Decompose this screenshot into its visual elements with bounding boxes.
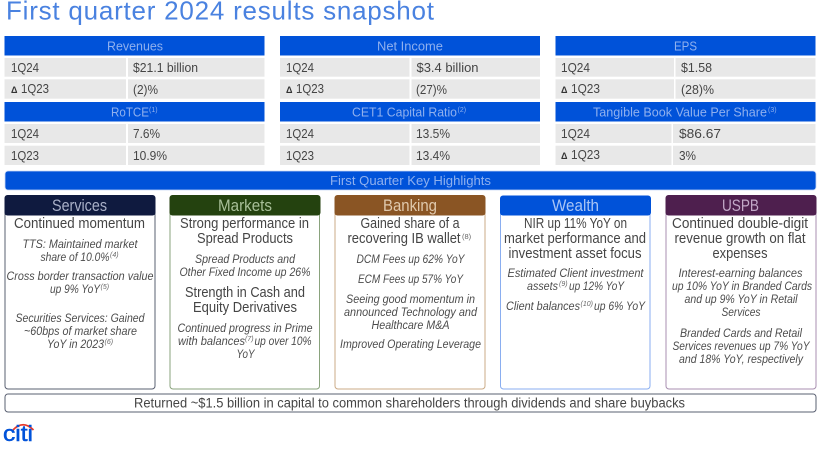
panel: tangible book value table [556, 102, 816, 165]
panel: Wealth: Client balances [506, 301, 580, 313]
panel: USPB: Interest-earning balances [678, 268, 803, 280]
panel: Services: TTS: Maintained market [22, 239, 138, 251]
panel: net income table: Net Income [377, 38, 443, 54]
icon: citi logo: citi [3, 421, 33, 446]
panel: CET1 capital ratio table: 13.5% [416, 127, 450, 141]
panel: EPS table: (28)% [681, 83, 714, 97]
panel: revenues table: Δ [11, 85, 18, 95]
panel: net income table: $3.4 billion [416, 61, 479, 75]
panel: Banking [334, 195, 486, 389]
panel: Banking: Improved Operating Leverage [340, 339, 481, 351]
panel: revenues table: $21.1 billion [133, 61, 198, 75]
panel: Banking: announced Technology and [344, 307, 478, 319]
panel: Markets: (7) [245, 336, 254, 343]
highlights banner: First Quarter Key Highlights [330, 173, 491, 188]
panel: Wealth: up 6% YoY [594, 301, 646, 313]
panel: EPS table: $1.58 [681, 61, 712, 75]
panel: Services: ~60bps of market share [24, 326, 137, 338]
panel: Services: Continued momentum [14, 216, 145, 232]
panel: USPB: Services [722, 307, 761, 319]
panel: RoTCE table: (1) [149, 107, 158, 114]
panel: CET1 capital ratio table: (2) [458, 107, 466, 114]
panel: Services: Services [52, 196, 107, 215]
panel: CET1 capital ratio table: CET1 Capital Ratio [352, 104, 457, 120]
panel: Banking: Healthcare M&A [372, 320, 450, 332]
panel: revenues table: 1Q23 [21, 82, 49, 96]
panel: Wealth: Wealth [552, 196, 599, 215]
panel: Markets: YoY [236, 349, 256, 361]
panel: EPS table [556, 36, 816, 99]
panel: Banking: (8) [462, 232, 472, 241]
panel: tangible book value table: $86.67 [679, 127, 721, 141]
panel: USPB: expenses [712, 246, 768, 262]
panel: Services: YoY in 2023 [47, 339, 105, 351]
panel: Markets: Spread Products and [195, 254, 296, 266]
panel: net income table: (27)% [416, 83, 447, 97]
panel: Services: (6) [104, 339, 113, 346]
panel: Markets [170, 195, 320, 389]
panel: Wealth: Estimated Client investment [508, 268, 644, 280]
highlights banner [5, 171, 816, 190]
panel: USPB: Continued double-digit [672, 216, 808, 232]
panel: Wealth: assets [527, 281, 558, 293]
panel: net income table: 1Q24 [286, 61, 314, 75]
panel: USPB: and 18% YoY, respectively [679, 354, 804, 366]
panel: CET1 capital ratio table: 13.4% [416, 149, 450, 163]
panel: Wealth: investment asset focus [508, 246, 642, 262]
panel: Wealth: market performance and [504, 231, 646, 247]
panel: tangible book value table: 1Q24 [561, 127, 590, 141]
panel: Banking: ECM Fees up 57% YoY [358, 274, 464, 286]
panel: CET1 capital ratio table: 1Q24 [286, 127, 314, 141]
panel: Wealth: (9) [559, 281, 568, 288]
panel: Services: up 9% YoY [50, 284, 101, 296]
panel: tangible book value table: Δ [561, 151, 568, 161]
panel: Markets: with balances [178, 336, 245, 348]
panel: EPS table: 1Q24 [561, 61, 590, 75]
panel: Banking: Seeing good momentum in [346, 294, 475, 306]
panel: Services [4, 195, 156, 389]
panel: tangible book value table: (3) [768, 107, 777, 114]
callout: capital returned [5, 394, 816, 412]
panel: EPS table: 1Q23 [571, 82, 600, 96]
panel: Services: (4) [110, 252, 119, 259]
panel: RoTCE table: 1Q23 [11, 149, 39, 163]
panel: RoTCE table: 10.9% [133, 149, 167, 163]
panel: Services: Cross border transaction value [6, 271, 154, 283]
panel: Markets: Continued progress in Prime [178, 323, 312, 335]
panel: EPS table: EPS [674, 38, 697, 54]
panel: EPS table: Δ [561, 85, 568, 95]
panel: revenues table: (2)% [133, 83, 158, 97]
panel: Services: share of 10.0% [40, 252, 110, 264]
panel: Markets: Strong performance in [180, 216, 309, 232]
panel: Banking: Gained share of a [360, 216, 460, 232]
panel: Wealth: (10) [580, 301, 593, 308]
panel: USPB: revenue growth on flat [674, 231, 806, 247]
panel: USPB [666, 195, 816, 389]
panel: tangible book value table: Tangible Book Value Per Share [593, 104, 767, 120]
panel: net income table: Δ [286, 85, 293, 95]
panel: USPB: and up 9% YoY in Retail [684, 294, 798, 306]
panel: CET1 capital ratio table [280, 102, 540, 165]
panel: Markets: Other Fixed Income up 26% [180, 267, 310, 279]
panel: tangible book value table: 1Q23 [571, 148, 600, 162]
panel: RoTCE table: RoTCE [111, 104, 149, 120]
panel: Wealth: NIR up 11% YoY on [524, 216, 627, 232]
panel: RoTCE table [4, 102, 264, 165]
panel: Markets: up over 10% [254, 336, 312, 348]
panel: Markets: Spread Products [197, 231, 293, 247]
panel: net income table [280, 36, 540, 99]
panel: Banking: DCM Fees up 62% YoY [356, 254, 466, 266]
panel: USPB: USPB [722, 196, 759, 215]
panel: USPB: Branded Cards and Retail [680, 328, 802, 340]
panel: Services: (5) [100, 284, 109, 291]
panel: Services: Securities Services: Gained [16, 313, 145, 325]
panel: Markets: Equity Derivatives [193, 300, 297, 316]
panel: revenues table [4, 36, 264, 99]
panel: tangible book value table: 3% [679, 149, 696, 163]
panel: CET1 capital ratio table: 1Q23 [286, 149, 314, 163]
panel: RoTCE table: 1Q24 [11, 127, 39, 141]
panel: revenues table: Revenues [107, 38, 163, 54]
panel: Markets: Markets [218, 196, 272, 215]
panel: Banking: Banking [383, 196, 437, 215]
panel: Markets: Strength in Cash and [185, 285, 305, 301]
panel: Banking: recovering IB wallet [348, 231, 460, 247]
callout: capital returned: Returned ~$1.5 billion in capital to common shareholders through dividends and share buybacks [134, 396, 685, 410]
panel: revenues table: 1Q24 [11, 61, 39, 75]
panel: Wealth: up 12% YoY [569, 281, 625, 293]
panel: RoTCE table: 7.6% [133, 127, 160, 141]
panel: net income table: 1Q23 [296, 82, 324, 96]
panel: Wealth [500, 196, 651, 389]
